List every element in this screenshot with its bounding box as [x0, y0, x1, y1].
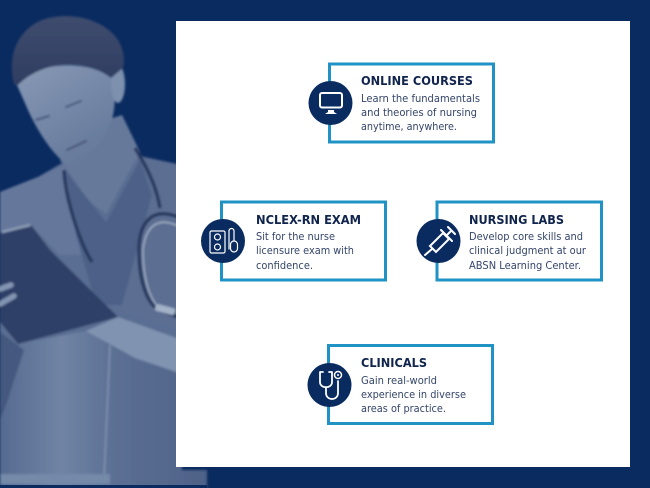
seam: [104, 345, 110, 480]
card frame: [330, 64, 494, 142]
eyes and lips: [36, 101, 86, 150]
fingers: [0, 285, 14, 304]
nurse scrubs base: [0, 155, 207, 488]
description: Learn the fundamentals: [361, 93, 480, 105]
stethoscope chest piece: [155, 304, 176, 315]
card frame: [222, 202, 386, 280]
description: [469, 231, 587, 272]
lower scrub: [0, 318, 207, 488]
description: [256, 231, 354, 272]
description: Sit for the nurse: [256, 231, 335, 243]
heading: NCLEX-RN EXAM: [256, 212, 361, 227]
description: [361, 375, 466, 415]
photo: nurse with tablet and stethoscope: [0, 16, 207, 488]
neck: [60, 115, 140, 214]
icon: syringe: [416, 219, 460, 263]
description: clinical judgment at our: [469, 245, 587, 257]
left shadow: [0, 332, 24, 420]
panel: white content area: [176, 21, 630, 467]
bottom edge strip: [0, 485, 207, 488]
hem: [0, 474, 110, 484]
heading: ONLINE COURSES: [361, 73, 473, 88]
stethoscope tube: [64, 148, 178, 317]
description: [361, 93, 480, 133]
card frame: [437, 202, 602, 280]
ear: [111, 65, 125, 103]
heading: CLINICALS: [361, 355, 427, 370]
description: ABSN Learning Center.: [469, 260, 581, 272]
tablet: [0, 226, 118, 344]
scrub right shoulder: [120, 155, 182, 330]
icon: stethoscope: [308, 363, 352, 407]
description: confidence.: [256, 260, 313, 272]
description: and theories of nursing: [361, 107, 477, 119]
heading: NURSING LABS: [469, 212, 564, 227]
icon: computer monitor: [308, 81, 352, 125]
hair: [12, 16, 124, 86]
description: Gain real-world: [361, 375, 437, 387]
tablet top edge highlight: [2, 225, 30, 232]
description: areas of practice.: [361, 403, 446, 415]
card: nursing labs: [416, 202, 602, 280]
icon: exam sheet and mouse: [201, 219, 245, 263]
description: anytime, anywhere.: [361, 121, 457, 133]
face: [17, 65, 115, 165]
scrub left shoulder: [0, 165, 92, 255]
description: licensure exam with: [256, 245, 354, 257]
description: experience in diverse: [361, 389, 466, 401]
sleeve and cuff: [86, 317, 182, 374]
card: clinicals: [308, 346, 492, 424]
card: NCLEX-RN exam: [201, 202, 386, 280]
stethoscope highlight: [143, 222, 178, 307]
scrub V neck: [65, 160, 152, 305]
description: Develop core skills and: [469, 231, 583, 243]
card frame: [328, 346, 492, 424]
card: online courses: [308, 64, 494, 142]
